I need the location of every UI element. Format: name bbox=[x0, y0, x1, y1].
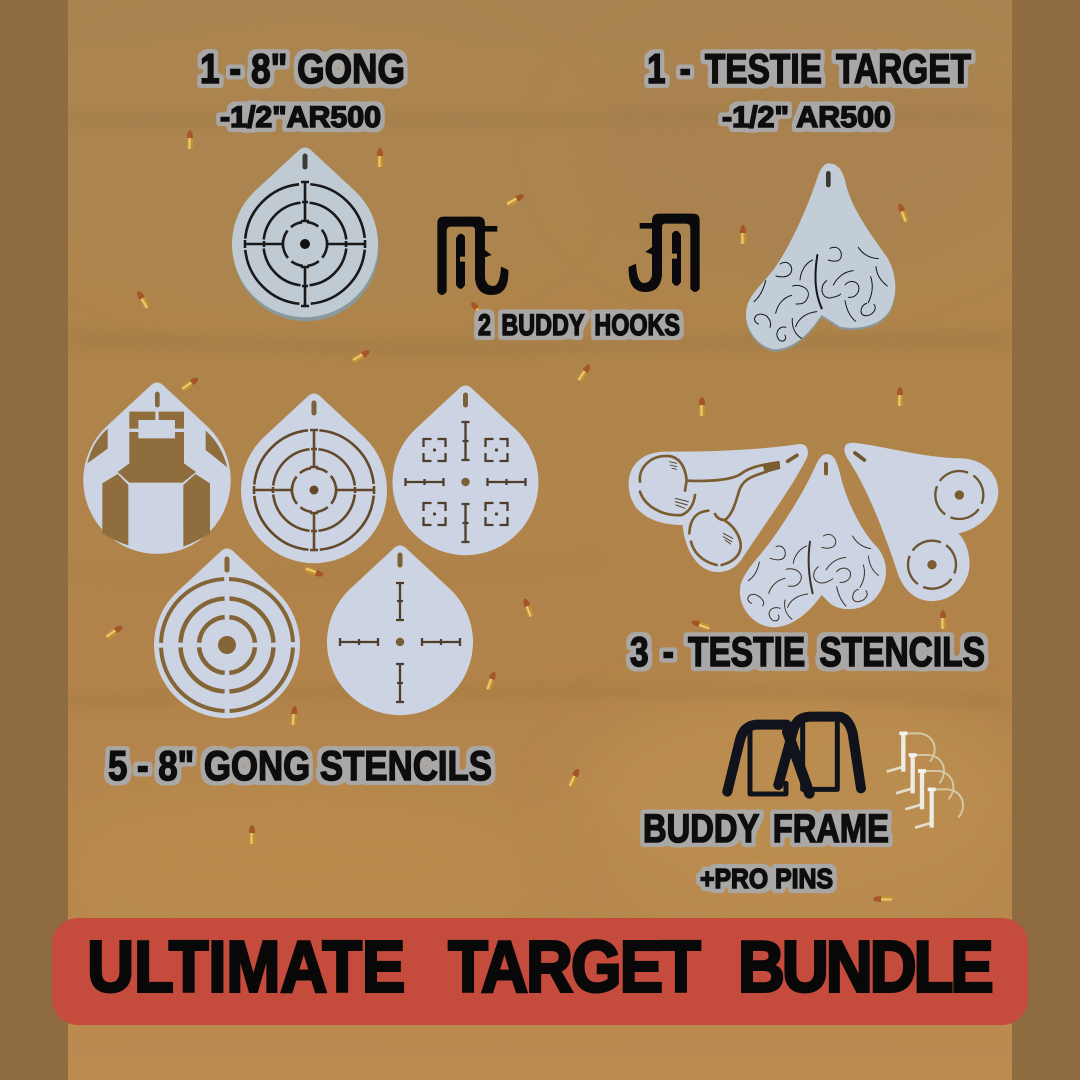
testie stencil: two circles bbox=[844, 443, 998, 601]
banner: ultimate target bundle: ULTIMATE bbox=[87, 926, 405, 1007]
right buddy hook bbox=[629, 214, 700, 292]
stencil: crosshair only bbox=[327, 546, 473, 715]
stencil: open rings bbox=[154, 548, 300, 718]
gong target with crosshair rings bbox=[232, 148, 379, 321]
heading: 3 - testie stencils: 3 - TESTIE STENCILS bbox=[630, 628, 985, 675]
subheading: pro pins: +PRO PINS bbox=[700, 863, 833, 894]
heading: 1 - testie target: 1 - TESTIE TARGET bbox=[647, 45, 971, 92]
stencil: crosshair rings bbox=[241, 394, 387, 563]
heading: 5 - 8" gong stencils: 5 - 8" GONG STENCILS bbox=[108, 742, 492, 789]
heading: buddy frame: BUDDY FRAME bbox=[643, 807, 889, 851]
subheading: testie thickness: -1/2" AR500 bbox=[722, 101, 891, 134]
stencil: crosshair with four corner squares bbox=[392, 386, 538, 555]
scattered bullets bbox=[105, 130, 946, 902]
subheading: gong thickness: -1/2"AR500 bbox=[220, 101, 381, 134]
testie target bbox=[746, 163, 895, 352]
left buddy hook bbox=[437, 217, 508, 295]
stencil: soldier silhouette bbox=[83, 383, 231, 554]
banner: ultimate target bundle bbox=[52, 918, 1028, 1025]
testie stencil: anatomy outline bbox=[629, 444, 808, 572]
buddy frame bbox=[727, 717, 861, 794]
banner: ultimate target bundle: TARGET bbox=[448, 926, 701, 1007]
heading: 2 buddy hooks: 2 BUDDY HOOKS bbox=[478, 309, 680, 342]
banner: ultimate target bundle: BUNDLE bbox=[738, 926, 991, 1007]
heading: 1 - 8" gong: 1 - 8" GONG bbox=[200, 45, 405, 92]
testie stencil: hairy bbox=[740, 454, 886, 627]
pro pins bbox=[887, 733, 963, 828]
